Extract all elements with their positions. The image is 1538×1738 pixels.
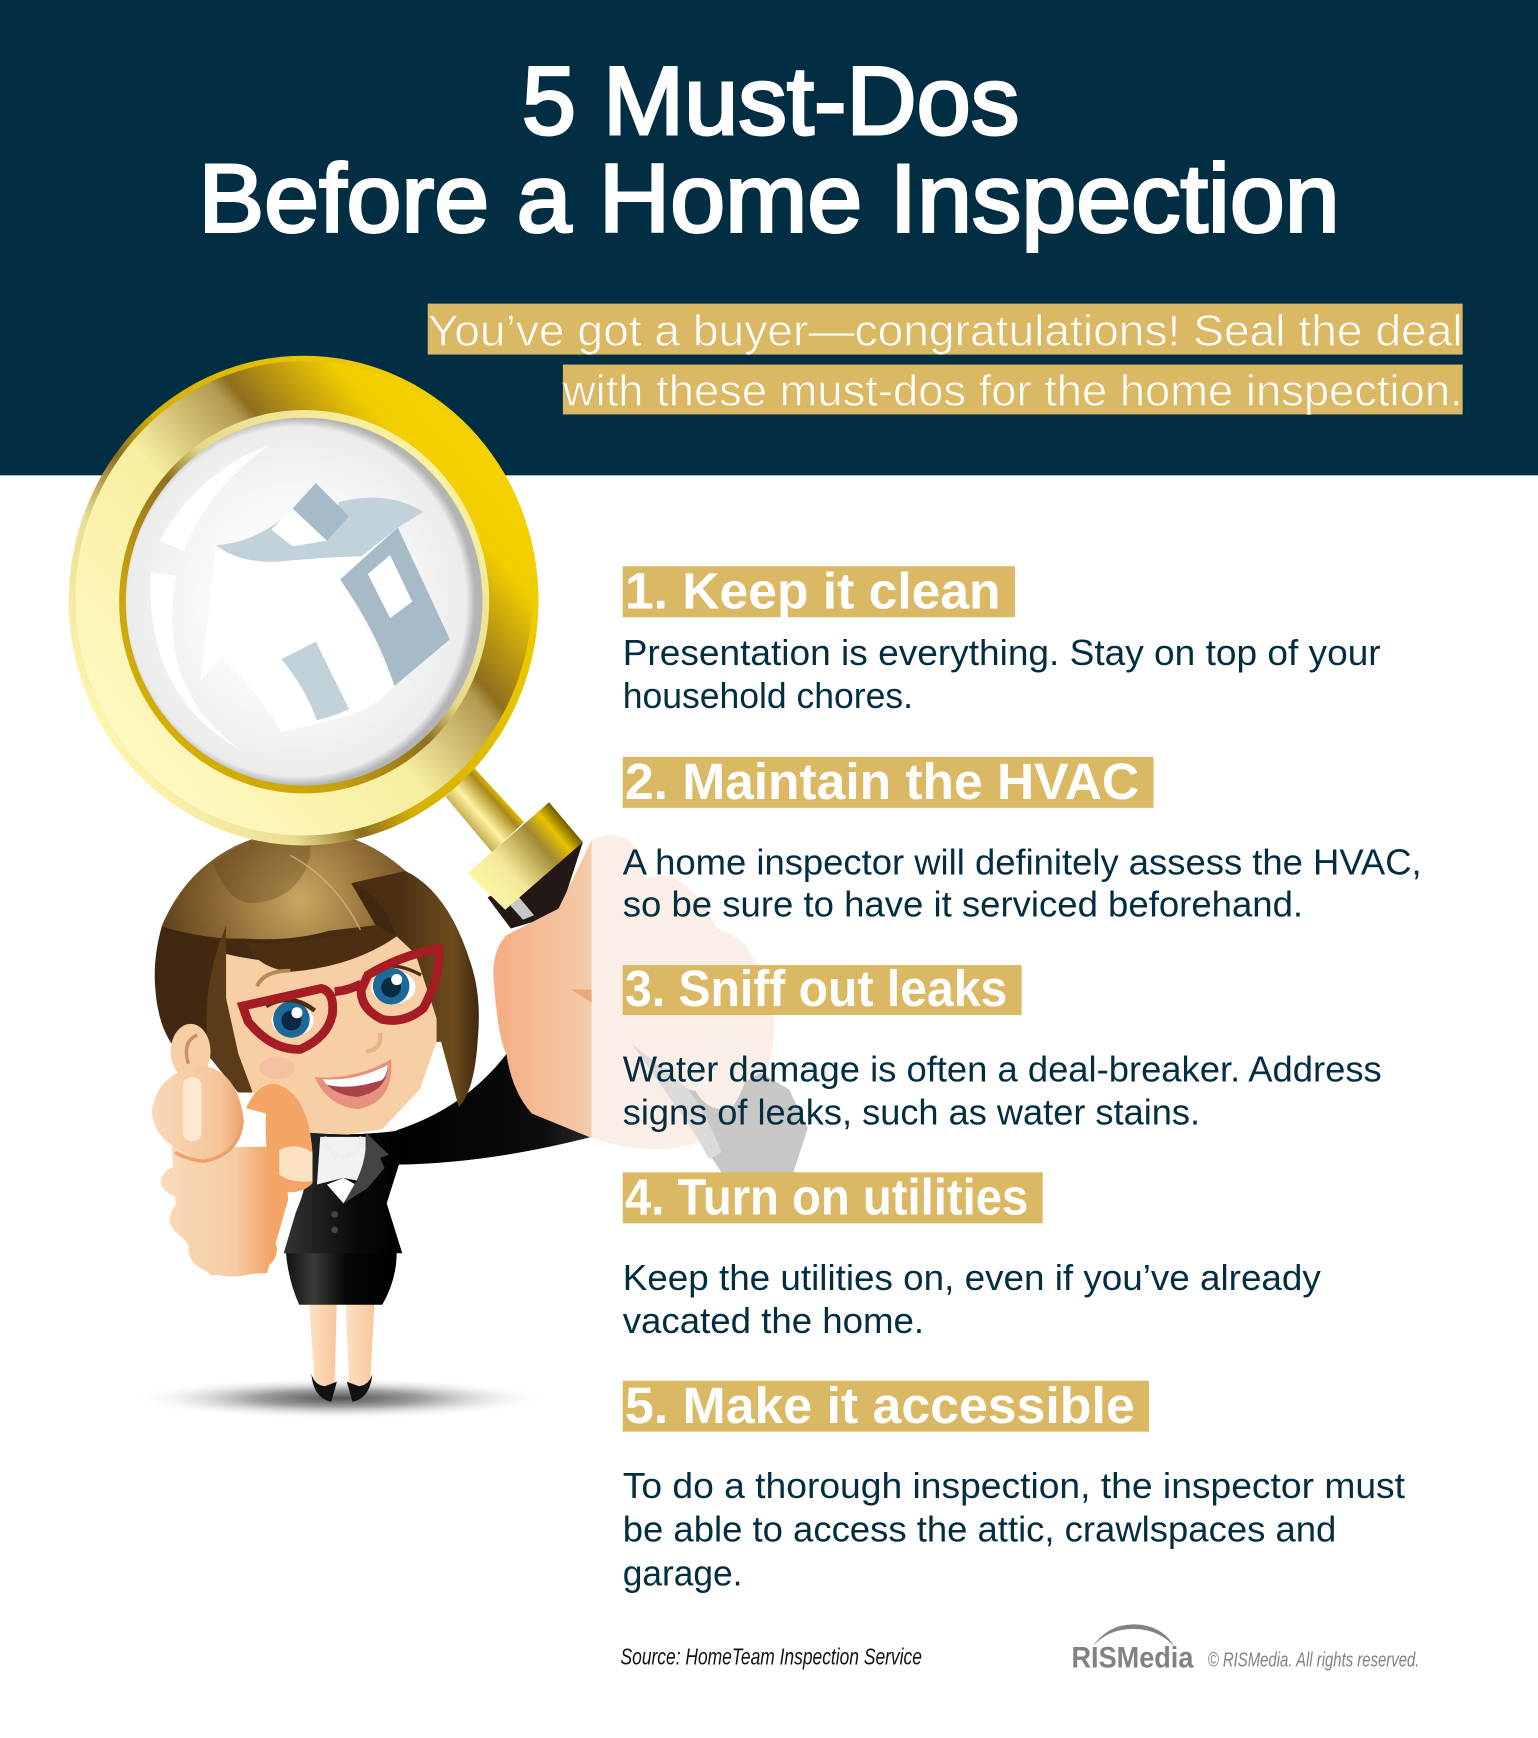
- nose: [366, 1033, 380, 1052]
- step 5: be able to access the attic, crawlspaces and: [623, 1508, 1336, 1549]
- jacket: [284, 1130, 402, 1253]
- step 4: 4. Turn on utilities: [625, 1168, 1028, 1225]
- cheek blush: [259, 1057, 295, 1079]
- step 4: Keep the utilities on, even if you’ve already: [623, 1257, 1321, 1298]
- hair top highlight: [162, 830, 406, 939]
- inner bezel: [119, 410, 489, 793]
- step 2: so be sure to have it serviced beforehand.: [623, 883, 1303, 924]
- house icon: [201, 483, 450, 732]
- step 5: 5. Make it accessible: [625, 1377, 1135, 1434]
- face: [226, 936, 437, 1135]
- magnifier stem and collar: [445, 768, 583, 910]
- side strand: [206, 925, 253, 1093]
- step 3: 3. Sniff out leaks: [625, 960, 1007, 1017]
- big hand opaque part: [493, 840, 592, 1138]
- step 3: Water damage is often a deal-breaker. Address: [623, 1048, 1382, 1089]
- ear: [171, 1024, 211, 1079]
- glass highlights: [160, 445, 268, 551]
- bangs: [246, 925, 397, 972]
- big hand faded part: [592, 835, 808, 1172]
- step 2: 2. Maintain the HVAC: [625, 753, 1139, 810]
- title: [198, 48, 1340, 253]
- magnifier lens: [69, 356, 539, 845]
- copyright note: © RISMedia. All rights reserved.: [1208, 1650, 1419, 1672]
- step 4: [623, 1168, 1321, 1341]
- step 1: Presentation is everything. Stay on top of your: [623, 632, 1381, 673]
- gold rim: [69, 356, 539, 845]
- subtitle callout: with these must-dos for the home inspection.: [562, 368, 1463, 416]
- eyebrow: [257, 971, 290, 986]
- subtitle callout: [428, 304, 1463, 416]
- eyes: [266, 966, 421, 1038]
- title: 5 Must-Dos: [522, 48, 1019, 155]
- glasses: [243, 949, 439, 1049]
- blouse and pearls: [317, 1132, 389, 1233]
- step 2: [623, 753, 1422, 924]
- step 5: To do a thorough inspection, the inspector must: [623, 1465, 1405, 1506]
- magnifier handle (black grip): [488, 842, 583, 929]
- ground shadow: [129, 1377, 550, 1419]
- RISMedia logo: RISMedia: [1072, 1642, 1194, 1675]
- faded finger: [692, 997, 750, 1109]
- step 2: A home inspector will definitely assess the HVAC,: [623, 841, 1422, 882]
- glass: [126, 418, 483, 786]
- skirt: [286, 1252, 397, 1305]
- step 3: [623, 960, 1382, 1133]
- step 1: 1. Keep it clean: [625, 562, 1001, 619]
- RISMedia logo: [1072, 1624, 1194, 1675]
- hair back: [155, 830, 479, 1107]
- gold ring: [75, 361, 532, 835]
- character: woman with magnifying glass: [69, 356, 808, 1419]
- subtitle callout: You’ve got a buyer—congratulations! Seal the deal: [428, 308, 1463, 356]
- step 1: household chores.: [623, 675, 913, 716]
- step 5: garage.: [623, 1553, 742, 1594]
- mouth: [315, 1059, 391, 1109]
- title: Before a Home Inspection: [198, 146, 1340, 253]
- header band: [0, 0, 1538, 475]
- source note: Source: HomeTeam Inspection Service: [621, 1643, 922, 1669]
- fist: [152, 1065, 312, 1276]
- faded grip: [633, 1045, 808, 1172]
- step 5: [623, 1377, 1405, 1594]
- step 4: vacated the home.: [623, 1300, 924, 1341]
- legs and shoes: [309, 1302, 375, 1402]
- step 3: signs of leaks, such as water stains.: [623, 1092, 1200, 1133]
- step 1: [623, 562, 1381, 716]
- arm: [397, 1053, 592, 1165]
